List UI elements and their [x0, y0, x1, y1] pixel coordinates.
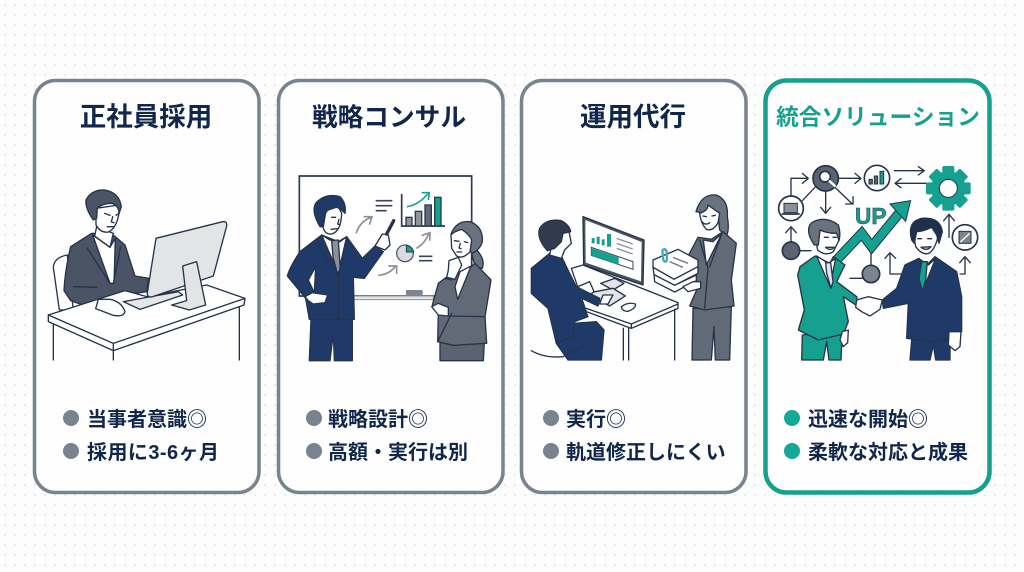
bullet list: 採用に3-6ヶ月: [87, 441, 219, 464]
heading: 統合ソリューション: 統合ソリューション: [776, 104, 980, 130]
panel: 正社員採用: [34, 80, 259, 492]
label: UP: UP: [855, 203, 886, 229]
bullet list: 戦略設計◎: [328, 407, 428, 431]
panel: 統合ソリューション: [766, 80, 990, 492]
illustration: handshake with network diagram and growth arrow: [779, 165, 978, 360]
growth arrow: [837, 201, 911, 260]
bullet list: 迅速な開始◎: [808, 408, 928, 431]
illustration: man at desktop computer: [48, 190, 245, 360]
bullet list: 柔軟な対応と成果: [808, 440, 968, 464]
panel: 運用代行: [522, 80, 746, 492]
heading: 運用代行: 運用代行: [580, 102, 686, 132]
network diagram: [779, 165, 978, 283]
handshake: [856, 297, 882, 316]
man: teal suit: [798, 219, 858, 360]
bullet list: [63, 408, 219, 464]
panel: 戦略コンサル: [278, 80, 503, 492]
heading: 戦略コンサル: 戦略コンサル: [312, 103, 466, 132]
bullet list: [543, 408, 726, 464]
icon: gear: [926, 166, 971, 211]
bullet list: 当事者意識◎: [87, 408, 207, 431]
bullet list: 軌道修正しにくい: [566, 441, 726, 464]
bullet list: [306, 407, 468, 464]
bullet list: [784, 408, 968, 464]
man: navy suit: [882, 218, 962, 360]
heading: 正社員採用: 正社員採用: [80, 102, 212, 132]
bullet list: 実行◎: [566, 408, 626, 431]
illustration: consultant presenting at whiteboard: [287, 176, 491, 361]
illustration: operator at computer receiving documents: [531, 195, 736, 360]
bullet list: 高額・実行は別: [328, 441, 468, 464]
